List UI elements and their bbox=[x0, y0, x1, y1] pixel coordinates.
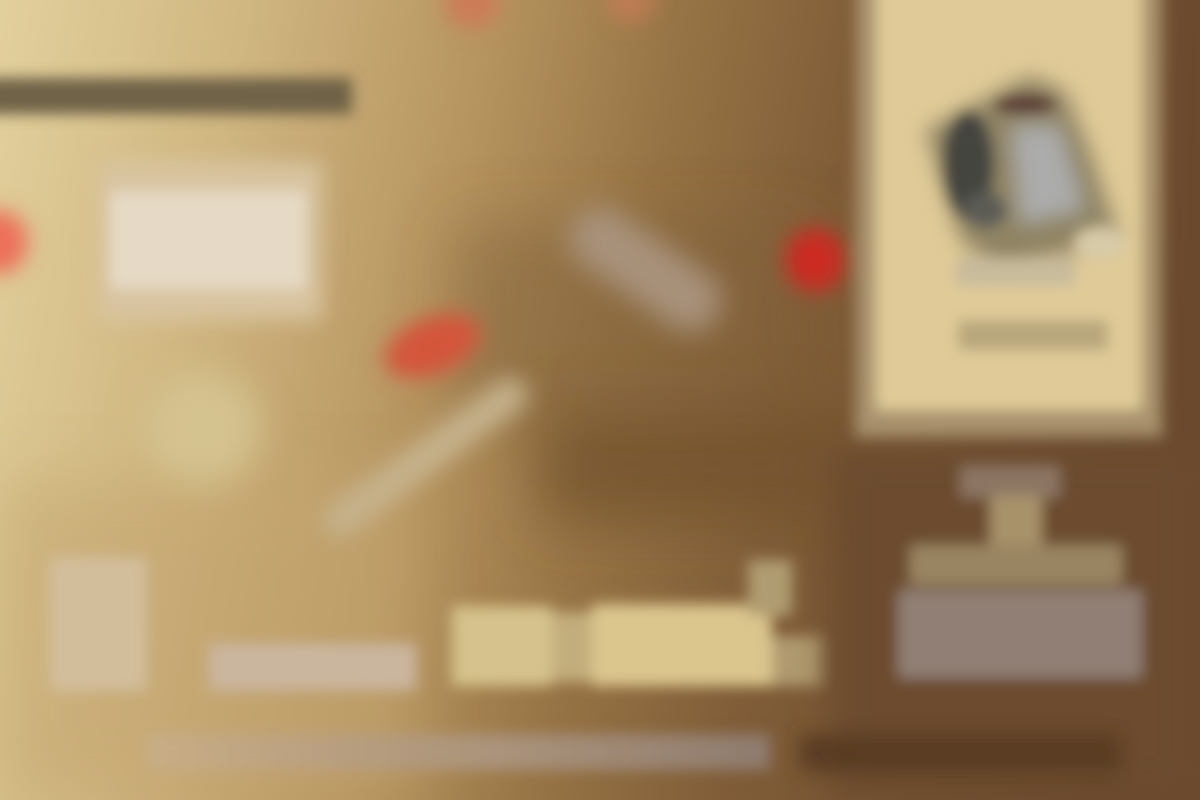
icon: base neck bbox=[990, 495, 1042, 555]
pale text block halo bbox=[98, 162, 322, 320]
red marker left bbox=[375, 301, 489, 391]
long bottom bar bbox=[145, 734, 770, 770]
panel: portrait card bbox=[856, 0, 1200, 440]
top header bar bbox=[0, 78, 352, 114]
top marker right bbox=[606, 0, 654, 22]
pale text block bbox=[110, 192, 306, 288]
red marker right bbox=[785, 228, 845, 292]
icon: base foot bbox=[898, 590, 1142, 678]
bottom-left warm tone bbox=[0, 480, 420, 800]
icon: base stem bbox=[960, 466, 1060, 498]
card fill bbox=[876, 0, 1142, 410]
right dark column bbox=[830, 445, 1200, 800]
icon: portrait bbox=[925, 75, 1126, 286]
left edge marker bbox=[0, 210, 28, 274]
card right edge bbox=[1184, 0, 1200, 440]
card caption bbox=[958, 320, 1108, 350]
top marker left bbox=[444, 0, 500, 28]
pale round icon bbox=[144, 372, 260, 484]
pale caption bar bbox=[209, 644, 416, 690]
yellow shape bbox=[452, 560, 822, 686]
bottom right shadow bbox=[800, 735, 1120, 771]
diagonal arrow bbox=[340, 395, 510, 520]
icon: base shoulder bbox=[910, 545, 1122, 585]
grey shape bbox=[600, 238, 690, 300]
central dark panel bbox=[450, 220, 820, 420]
lower central dark area bbox=[540, 410, 840, 520]
small pale rectangle bbox=[50, 558, 146, 690]
card frame bbox=[856, 0, 1162, 436]
